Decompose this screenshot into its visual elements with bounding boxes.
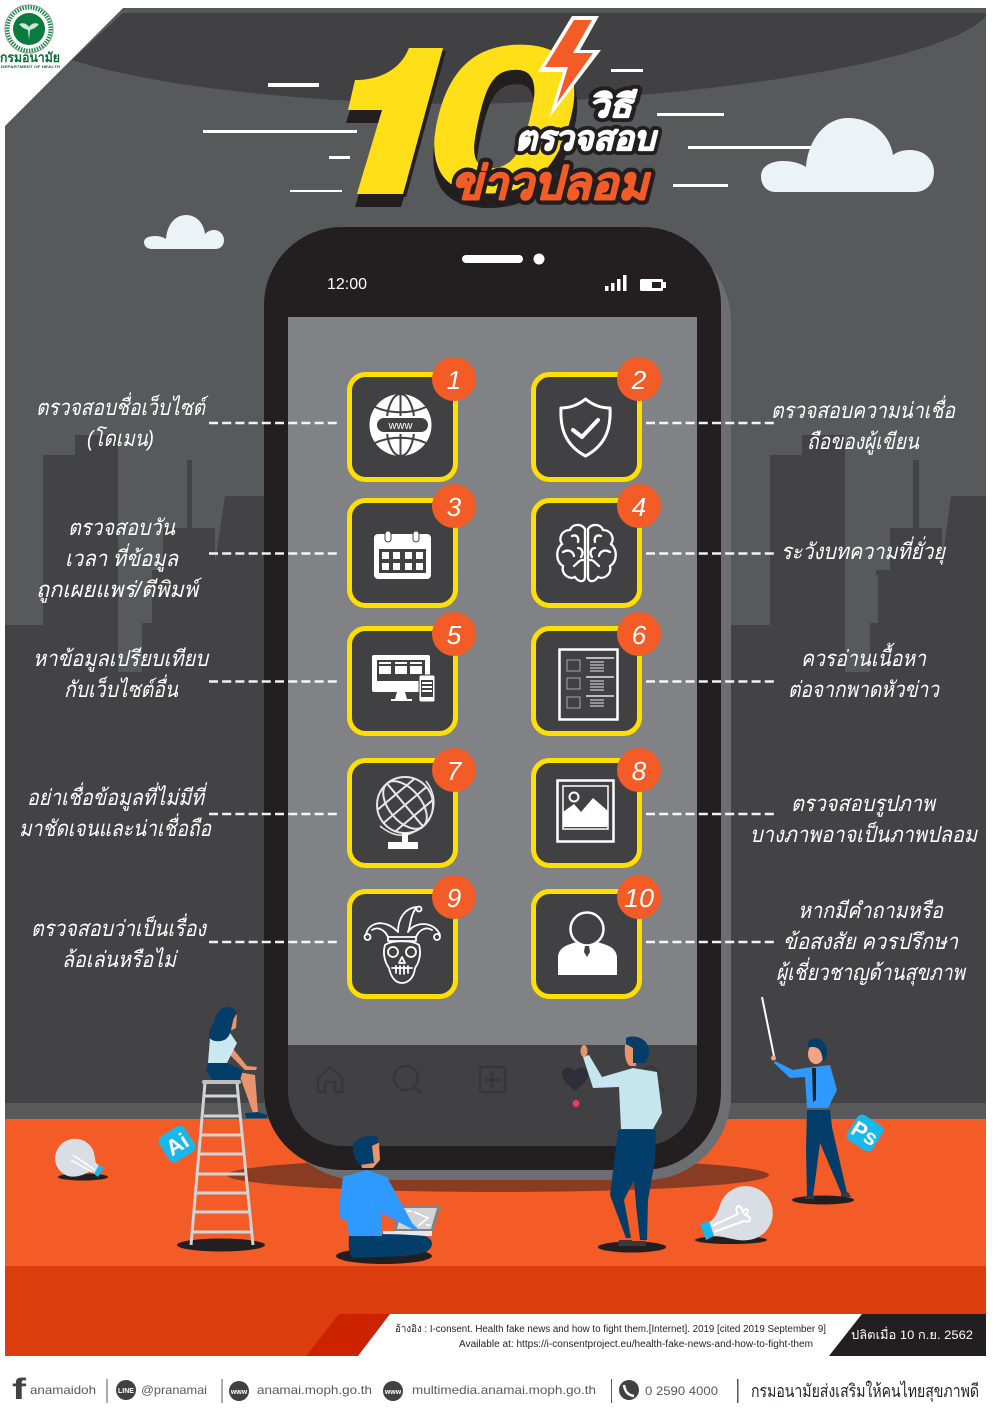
title word: check: ตรวจสอบ: [515, 120, 658, 158]
reference text: อ้างอิง : I-consent. Health fake news and how to fight them.[Internet]. 2019 [cited 2019 September 9]: [395, 1323, 826, 1335]
card 3: date: [350, 484, 476, 606]
badge 8: 8: [632, 756, 647, 786]
tab bar icons: [318, 1066, 664, 1093]
website: www: [230, 1389, 248, 1396]
notification dot: [572, 1100, 580, 1107]
label 8: ตรวจสอบรูปภาพ: [791, 791, 937, 817]
card 9: joke: [350, 875, 476, 996]
icon: document checklist: [560, 650, 618, 720]
label 10: ข้อสงสัย ควรปรึกษา: [783, 929, 959, 954]
title number 10: 1: [340, 4, 450, 234]
title number 10: 0: [425, 4, 575, 234]
multimedia website: multimedia.anamai.moph.go.th: [412, 1383, 596, 1397]
icon: calendar: [374, 531, 431, 579]
icon: desk globe: [366, 766, 444, 849]
illustration: man with pointer: [762, 997, 854, 1204]
illustration: woman on ladder: [177, 1007, 267, 1252]
badge 4: 4: [632, 492, 646, 522]
website: anamai.moph.go.th: [257, 1383, 372, 1397]
title word: check: ตรวจสอบ: [515, 120, 658, 158]
speed lines: [203, 69, 813, 192]
illustration: man standing at phone: [580, 1036, 666, 1252]
label 6: ควรอ่านเนื้อหา: [801, 642, 927, 671]
multimedia website: [383, 1381, 596, 1401]
phone speaker and camera: [462, 254, 544, 264]
label 7: มาชัดเจนและน่าเชื่อถือ: [19, 813, 212, 841]
line: [116, 1380, 207, 1400]
badge 3: 3: [447, 492, 462, 522]
line: LINE: [118, 1388, 134, 1395]
facebook: anamaidoh: [30, 1383, 96, 1397]
contact bar: [12, 1373, 979, 1406]
label 5: [33, 646, 210, 702]
badge 6: 6: [632, 620, 647, 650]
icon: battery: [640, 279, 666, 291]
reference text: [395, 1323, 826, 1350]
reference ribbon: [306, 1314, 986, 1356]
logo: department of health: [0, 5, 60, 69]
title number 10 shadow: 1: [340, 14, 450, 244]
phone clock: 12:00: [327, 276, 367, 293]
label 9: [31, 913, 208, 972]
logo: department of health: DEPARTMENT OF HEALTH: [1, 64, 60, 69]
badge 7: 7: [447, 756, 463, 786]
title word: fake news: ข่าวปลอม: [451, 157, 652, 209]
label 3: [36, 515, 203, 603]
label 4: ระวังบทความที่ยั่วยุ: [781, 536, 947, 565]
card 8: image: [534, 748, 661, 866]
icon: signal: [605, 275, 626, 291]
icon: brain: [557, 525, 616, 581]
card 2: author: [534, 357, 661, 480]
icon: shield: [561, 399, 610, 456]
icon: monitor and phone: [372, 655, 435, 702]
badge 1: 1: [447, 365, 461, 395]
phone number: 0 2590 4000: [645, 1384, 718, 1398]
title number 10 shadow: 0: [426, 17, 576, 247]
label 10: ผู้เชี่ยวชาญด้านสุขภาพ: [776, 957, 967, 986]
phone: [264, 227, 731, 1180]
badge 2: 2: [631, 365, 647, 395]
icon: small light bulb: [55, 1139, 108, 1180]
label 3: ตรวจสอบวัน: [68, 515, 176, 540]
multimedia website: www: [384, 1389, 402, 1396]
title number 10 shadow: [346, 51, 578, 208]
badge 10: 10: [624, 883, 655, 913]
reference text: Available at: https://i-consentproject.eu/health-fake-news-and-how-to-fight-them: [459, 1339, 813, 1350]
label 10: [776, 898, 967, 986]
label 1: (โดเมน): [87, 426, 154, 451]
label 9: ตรวจสอบว่าเป็นเรื่อง: [31, 913, 208, 941]
icon: lightning bolt: [538, 16, 601, 118]
label 2: ตรวจสอบความน่าเชื่อ: [771, 395, 956, 423]
phone screen: [288, 317, 697, 1146]
website: [229, 1381, 372, 1401]
label 9: ล้อเล่นหรือไม่: [62, 947, 179, 972]
card 4: brain: [534, 484, 661, 606]
dashed connectors: [209, 423, 776, 942]
badge 5: 5: [447, 620, 462, 650]
phone number: [619, 1380, 718, 1400]
label 5: กับเว็บไซต์อื่น: [64, 674, 179, 702]
label 6: [788, 642, 940, 702]
label 3: เวลา ที่ข้อมูล: [65, 543, 179, 572]
title word: how to: วิธี: [588, 88, 638, 124]
label 1: ตรวจสอบชื่อเว็บไซต์: [36, 392, 209, 420]
ground shadow under phone: [227, 1158, 769, 1192]
icon: Ai badge: [156, 1123, 198, 1165]
line: @pranamai: [141, 1383, 207, 1397]
label 2: [771, 395, 956, 455]
illustration: man sitting with laptop: [336, 1136, 441, 1264]
label 8: บางภาพอาจเป็นภาพปลอม: [750, 821, 978, 847]
card 1: website: [350, 357, 476, 480]
title word: how to: วิธี: [588, 88, 638, 124]
card 6: article: [534, 612, 661, 734]
facebook: f: [12, 1373, 27, 1406]
label 5: หาข้อมูลเปรียบเทียบ: [33, 646, 210, 672]
cloud: small: [144, 215, 224, 249]
badge 9: 9: [447, 883, 461, 913]
title: [346, 16, 662, 208]
label 7: อย่าเชื่อข้อมูลที่ไม่มีที่: [27, 782, 208, 811]
icon: photo: [558, 780, 614, 842]
icon: person: [558, 912, 617, 975]
title number 10: [348, 44, 574, 194]
label 6: ต่อจากพาดหัวข่าว: [788, 677, 940, 702]
icon: www globe: www: [388, 420, 412, 432]
label 2: ถือของผู้เขียน: [807, 429, 920, 455]
icon: Ps badge: Ps: [847, 1116, 883, 1151]
production date: ปลิตเมื่อ 10 ก.ย. 2562: [851, 1326, 973, 1342]
logo: department of health: กรมอนามัย: [0, 50, 60, 65]
label 7: [19, 782, 212, 841]
label 8: [750, 791, 978, 847]
label 1: [36, 392, 209, 451]
card 7: sources: [350, 748, 476, 866]
icon: Ai badge: Ai: [161, 1128, 193, 1161]
icon: jester skull: [364, 906, 440, 983]
icon: large light bulb: [695, 1186, 773, 1244]
title word: fake news: ข่าวปลอม: [451, 157, 652, 209]
card 10: expert: [534, 875, 661, 996]
cloud: large: [761, 118, 934, 192]
label 10: หากมีคำถามหรือ: [798, 898, 944, 923]
facebook: [12, 1373, 96, 1406]
card 5: compare: [350, 612, 476, 734]
label 3: ถูกเผยแพร่/ตีพิมพ์: [36, 577, 203, 603]
